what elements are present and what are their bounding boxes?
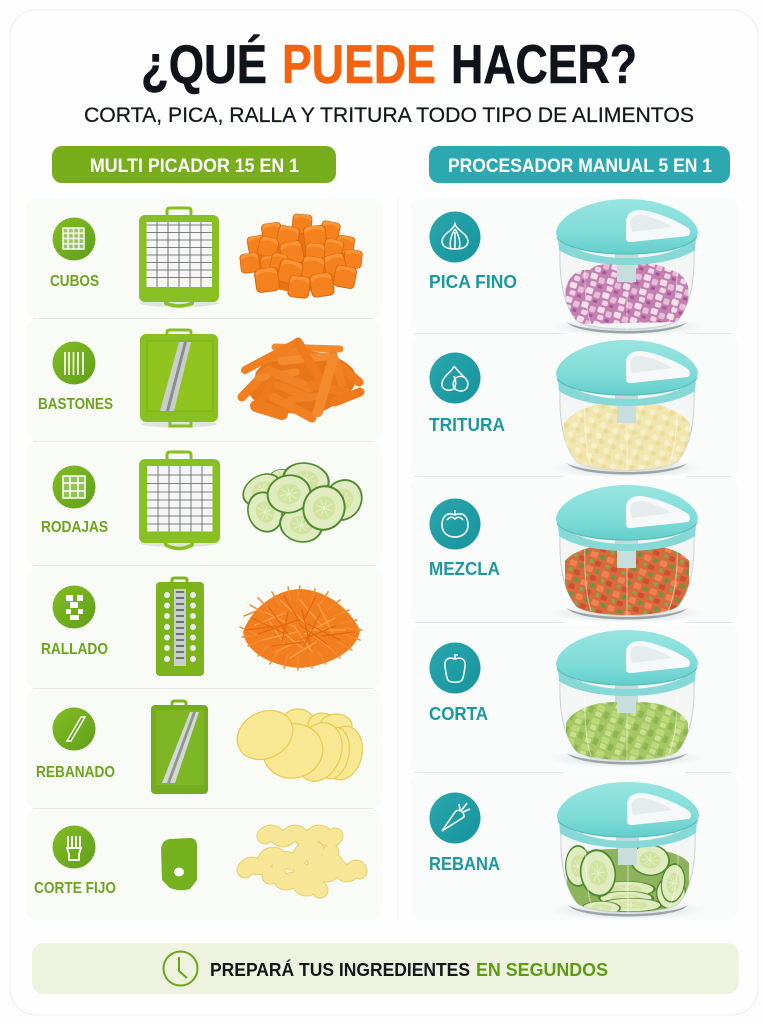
tool: bastones blade	[140, 330, 218, 428]
row: bastones	[26, 320, 382, 441]
pill heading: multi picador	[52, 146, 336, 183]
label: pica fino: PICA FINO	[429, 272, 517, 292]
label: corte fijo: CORTE FIJO	[34, 880, 116, 897]
icon: bastones	[52, 342, 96, 384]
food: potato slices	[229, 701, 367, 788]
pill heading: multi picador: MULTI PICADOR 15 EN 1	[90, 156, 299, 177]
label: rebana: REBANA	[429, 854, 500, 874]
label: cubos: CUBOS	[50, 273, 99, 290]
label: rebanado: REBANADO	[36, 764, 115, 781]
food: crinkle-cut potatoes	[245, 833, 359, 890]
row: mezcla	[430, 485, 698, 621]
icon: carrot	[430, 792, 480, 844]
row: cubos	[26, 198, 382, 318]
label: bastones: BASTONES	[38, 396, 113, 413]
tool: rallado blade	[156, 578, 204, 676]
tool: corte fijo blade	[161, 838, 197, 890]
row: rallado	[26, 567, 382, 688]
food: carrot sticks	[242, 342, 360, 418]
pill heading: procesador manual: PROCESADOR MANUAL 5 EN 1	[448, 156, 712, 177]
title: ¿QUÉ	[141, 33, 267, 95]
banner text: PREPARÁ TUS INGREDIENTES	[210, 959, 470, 980]
icon: clock	[164, 952, 198, 986]
icon: garlic	[430, 352, 480, 404]
panel: procesador manual	[429, 199, 699, 919]
icon: rallado	[52, 586, 96, 628]
label: tritura: TRITURA	[429, 415, 505, 435]
title: HACER?	[451, 33, 637, 95]
tool: rebanado blade	[151, 701, 208, 794]
chopper with onion	[556, 199, 698, 335]
row: tritura	[429, 340, 698, 476]
chopper with garlic	[556, 340, 698, 476]
icon: corte fijo	[52, 826, 96, 868]
tool: cubos blade	[139, 208, 219, 307]
food: shredded carrot	[240, 586, 362, 670]
icon: onion	[430, 212, 480, 262]
food: cucumber slices	[236, 459, 370, 547]
label: rallado: RALLADO	[41, 641, 108, 658]
icon: tomato	[430, 498, 480, 550]
banner text: EN SEGUNDOS	[476, 960, 608, 980]
chopper with green vegetables	[556, 630, 698, 766]
icon: pepper	[430, 642, 480, 694]
banner	[32, 943, 739, 994]
row: corta	[430, 630, 698, 767]
row: rebana	[430, 782, 699, 919]
row: corte fijo	[26, 810, 382, 920]
icon: rodajas	[52, 466, 96, 508]
pill heading: procesador manual	[429, 146, 730, 183]
banner text	[210, 959, 608, 980]
title	[141, 33, 637, 95]
subtitle: CORTA, PICA, RALLA Y TRITURA TODO TIPO DE ALIMENTOS	[84, 104, 694, 127]
label: mezcla: MEZCLA	[429, 559, 500, 579]
row: rebanado	[26, 690, 382, 808]
label: corta: CORTA	[429, 704, 488, 724]
icon: rebanado	[52, 708, 96, 750]
chopper with mixed vegetables	[556, 485, 698, 621]
title: PUEDE	[282, 33, 436, 95]
row: pica fino	[430, 199, 698, 335]
label: rodajas: RODAJAS	[41, 519, 108, 536]
row: rodajas	[26, 444, 382, 565]
chopper with cucumber	[557, 782, 699, 918]
icon: cubos	[52, 218, 96, 260]
food: carrot cubes	[240, 214, 363, 299]
tool: rodajas blade	[139, 452, 220, 548]
panel: multi picador	[26, 198, 382, 920]
